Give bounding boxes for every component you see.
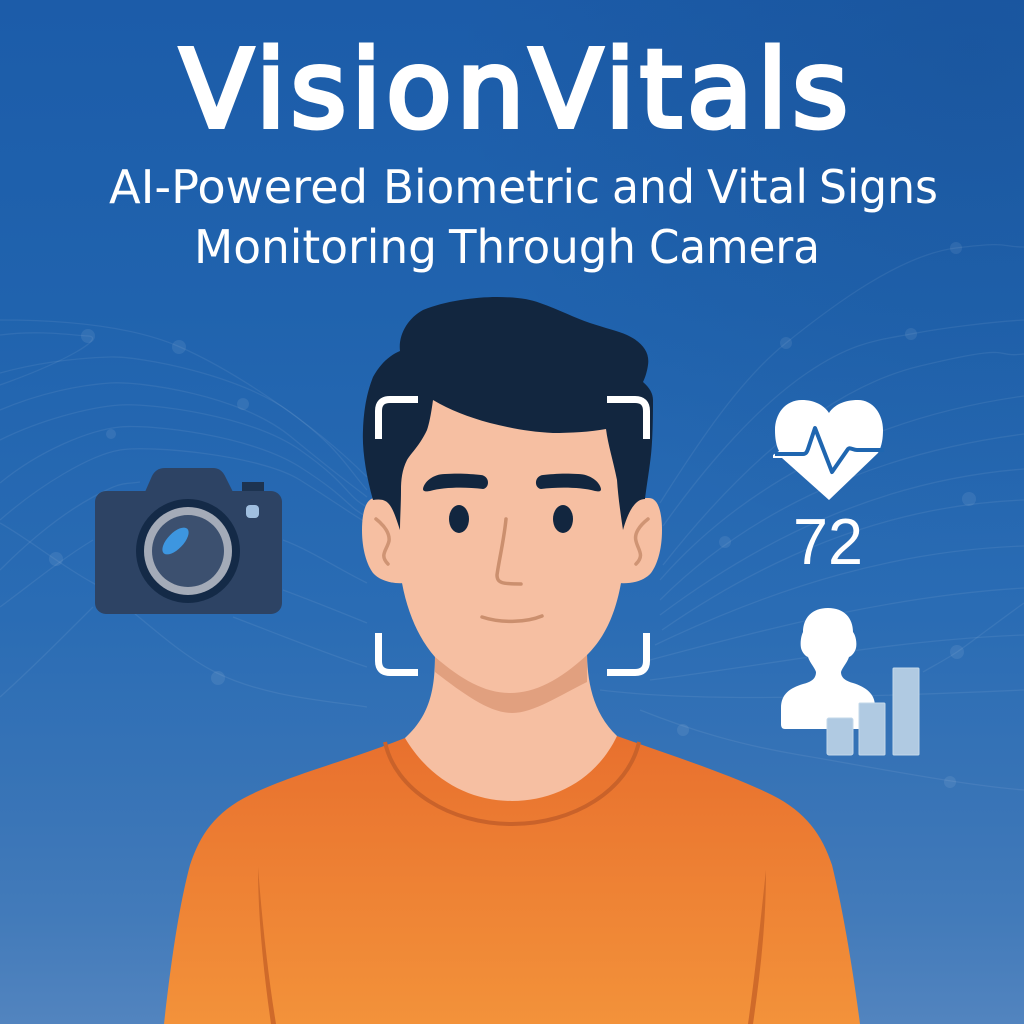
neck: [405, 650, 617, 801]
subtitle: Through: [448, 220, 636, 274]
left eyebrow: [423, 474, 488, 491]
mouth: [482, 616, 542, 621]
icon: person with bars: [781, 608, 919, 755]
subtitle: Monitoring: [194, 220, 437, 274]
face: [400, 400, 623, 693]
right ear: [618, 498, 662, 583]
left eye: [449, 505, 469, 533]
subtitle: [109, 160, 938, 274]
ear lines: [376, 519, 648, 564]
right eye: [553, 505, 573, 533]
background data nodes: [49, 242, 976, 788]
title: VisionVitals: [180, 28, 848, 152]
neck shadow: [435, 650, 587, 713]
left ear: [362, 498, 405, 583]
face scan brackets: [378, 400, 646, 672]
right eyebrow: [536, 474, 601, 491]
heart rate value: 72: [793, 505, 863, 578]
icon: camera: [95, 468, 282, 614]
subtitle: AI-Powered: [109, 160, 368, 214]
icon: heart with pulse: [773, 400, 884, 500]
subtitle: Camera: [649, 220, 820, 274]
background data waves: [0, 245, 1024, 790]
subtitle: Vital: [707, 160, 808, 214]
shirt: [164, 736, 860, 1024]
person illustration: [164, 297, 860, 1024]
subtitle: Signs: [819, 160, 938, 214]
hair: [363, 297, 653, 530]
subtitle: Biometric: [383, 160, 600, 214]
nose: [497, 519, 521, 584]
subtitle: and: [612, 160, 695, 214]
